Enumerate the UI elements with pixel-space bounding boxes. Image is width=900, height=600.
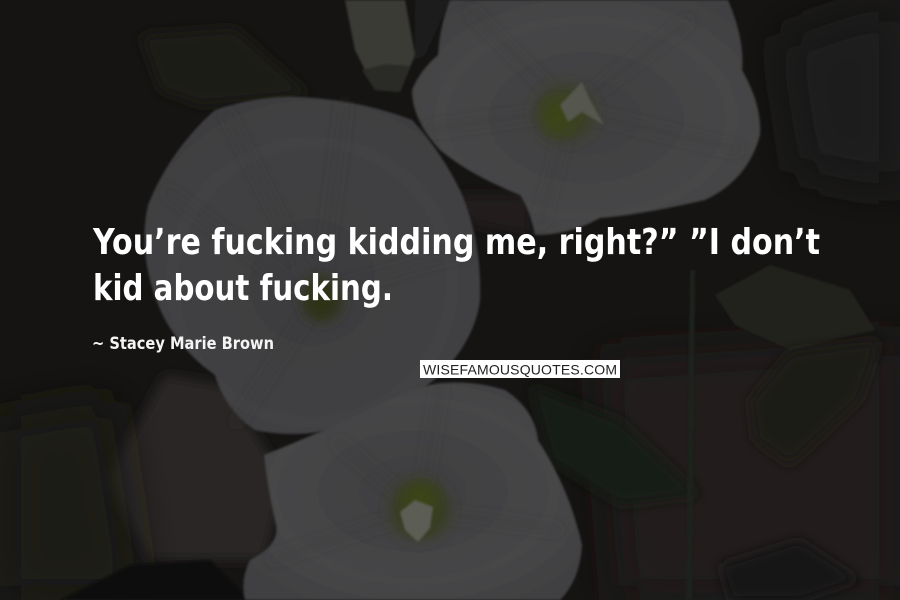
flower: top right (412, 0, 760, 235)
flower: bottom (243, 382, 582, 600)
watermark badge: WISEFAMOUSQUOTES.COM (423, 362, 617, 378)
author attribution: ~ Stacey Marie Brown (92, 334, 274, 354)
flower bud (345, 0, 450, 92)
flower: left (144, 97, 480, 434)
quote text: kid about fucking. (93, 268, 393, 309)
